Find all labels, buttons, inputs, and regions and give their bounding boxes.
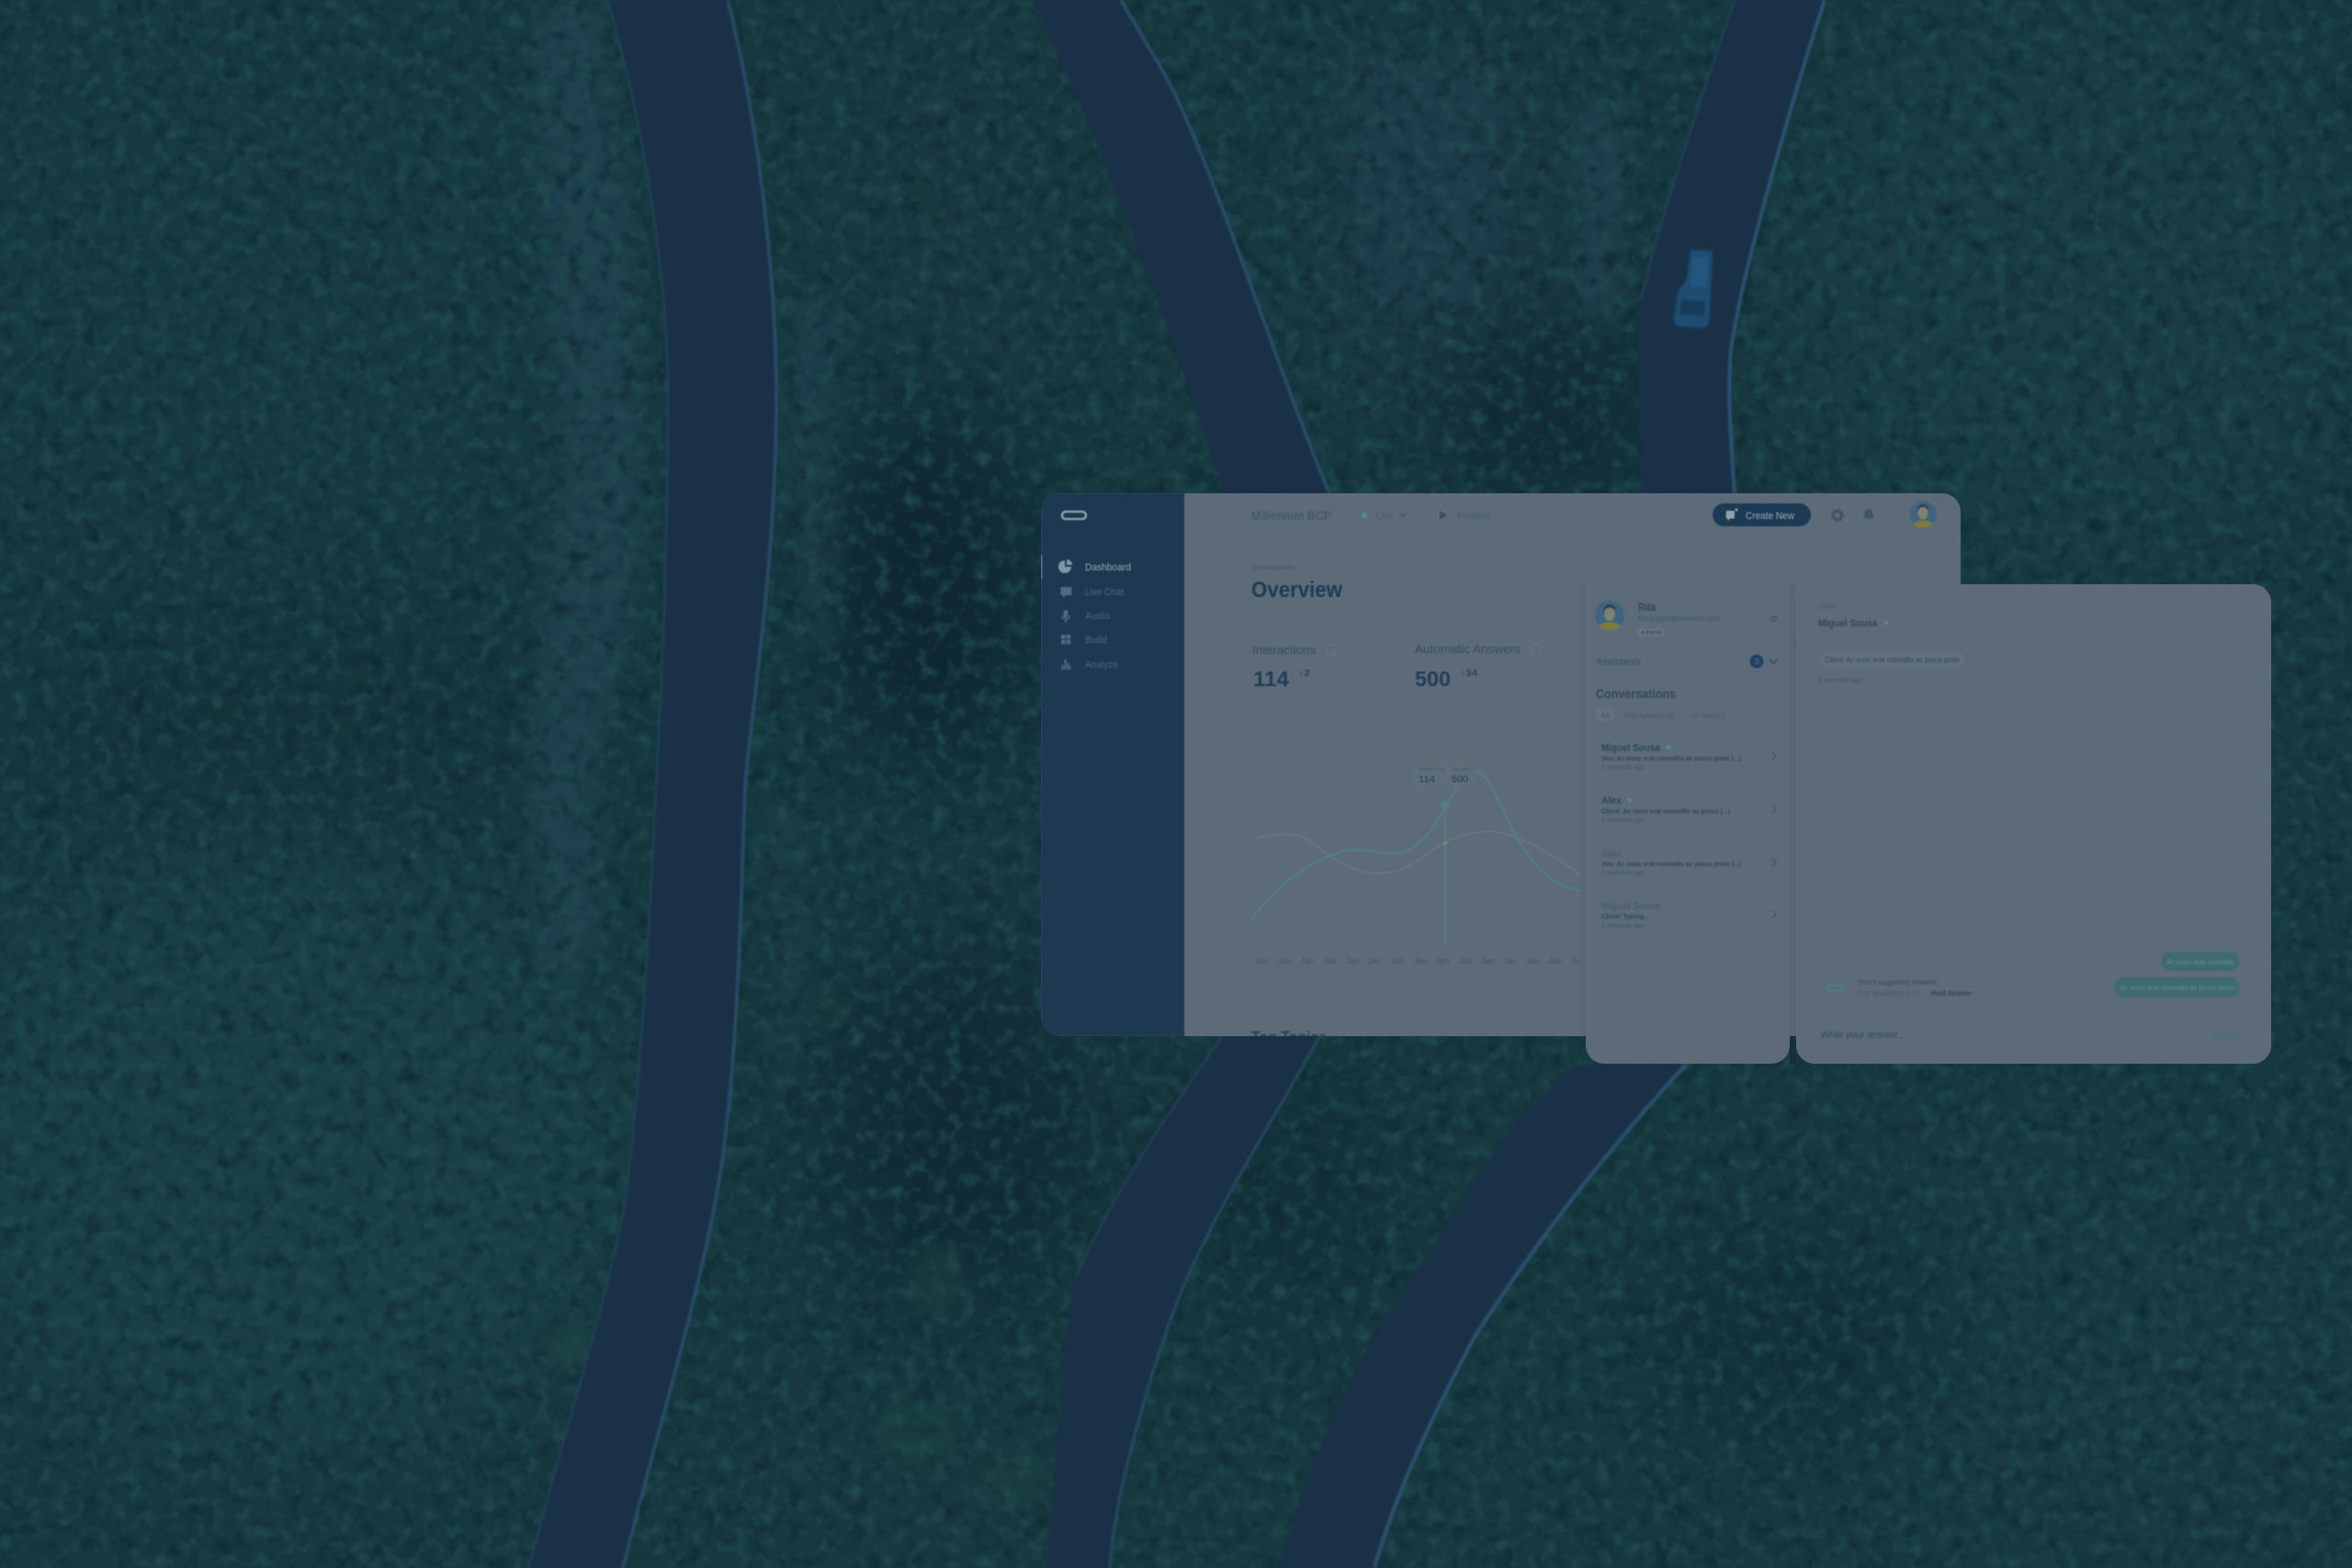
chart x axis labels: Jan <box>1301 956 1314 965</box>
user details: Rita <box>1638 601 1656 614</box>
conversation: Miguel Sousa <box>1601 742 1776 772</box>
metric: Automatic Answers: ↑34 <box>1460 669 1478 679</box>
conversation: Miguel Sousa typing: Client: Typing... <box>1601 912 1649 920</box>
chart x axis labels: Jan <box>1255 956 1269 965</box>
assistants row: Assistants <box>1596 657 1641 668</box>
icon: Visor logo <box>1827 985 1843 990</box>
conversation: Alex: Alex <box>1601 795 1623 807</box>
user details: rita.seguro@millenium.com <box>1638 614 1720 623</box>
conversation: Alex: Client: Ac nunc erat convallis ac purus (...) <box>1601 807 1730 815</box>
assistants row: 3 <box>1755 658 1759 666</box>
client header: Client <box>1818 603 1838 611</box>
suggested answer chip <box>2161 952 2240 971</box>
metric: Interactions: Interactions <box>1252 643 1317 657</box>
panel: main dashboard window <box>1040 493 1961 1048</box>
chart x axis labels: Jan <box>1346 956 1359 965</box>
road: middle road <box>1031 0 1329 1568</box>
chart x axis labels: Jan <box>1526 956 1540 965</box>
heading: Overview: Overview <box>1251 578 1342 603</box>
conversation: João: 2 seconds ago <box>1601 869 1645 876</box>
suggestion status: Hold Answer <box>1931 989 1972 998</box>
filter tabs: With Assistant (0) <box>1624 711 1675 720</box>
icon: small gear <box>1771 616 1777 621</box>
button: Preview <box>1440 511 1490 522</box>
client header: Miguel Sousa <box>1818 618 1878 629</box>
metric: Automatic Answers: Automatic Answers <box>1415 642 1521 656</box>
chart x axis labels: Jan <box>1414 956 1427 965</box>
heading: Top Topics (clipped): Top Topics <box>1251 1029 1327 1048</box>
active indicator <box>1041 555 1043 579</box>
conversation: Miguel Sousa typing: 2 seconds ago <box>1601 921 1645 930</box>
nav item: Build <box>1061 635 1107 646</box>
panel: sidebar <box>1040 493 1184 1036</box>
chart x axis labels: Jan <box>1481 956 1495 965</box>
metric: Automatic Answers <box>1415 642 1542 691</box>
conversation: Miguel Sousa typing <box>1601 901 1776 930</box>
metric: Interactions: ↑2 <box>1298 669 1311 679</box>
nav item: Dashboard: Dashboard <box>1085 562 1131 573</box>
nav item: Live Chat <box>1060 587 1124 598</box>
answer input <box>1821 1030 2240 1041</box>
conversation: João: João <box>1601 849 1621 860</box>
nav item: Dashboard <box>1058 559 1131 573</box>
chart tooltip: 500 <box>1452 775 1468 784</box>
answer input: Write your answer... <box>1821 1030 1905 1041</box>
chart x axis labels: Jan <box>1504 956 1517 965</box>
nav item: Build: Build <box>1085 635 1107 646</box>
filter tabs: On Hold (1) <box>1690 711 1725 720</box>
conversation: Miguel Sousa typing: Miguel Sousa <box>1601 901 1661 912</box>
nav item: Analyze: Analyze <box>1085 660 1118 671</box>
suggestion status <box>1857 978 1972 998</box>
avatar: top bar <box>1909 502 1937 528</box>
metric: Interactions: 114 <box>1253 667 1289 691</box>
icon: settings gear <box>1832 509 1843 522</box>
suggested answer chip: Ac nunc erat convallis <box>2166 958 2234 966</box>
chart x axis labels <box>1255 956 1585 965</box>
top bar: project name: Millenium BCP <box>1251 508 1331 523</box>
heading: breadcrumb: DASHBOARD <box>1251 566 1296 571</box>
chart x axis labels: Jan <box>1391 956 1404 965</box>
chart x axis labels: Jan <box>1572 956 1585 965</box>
line chart: interactions and answers over time <box>1252 763 1585 965</box>
metric: Automatic Answers: 500 <box>1415 667 1451 691</box>
conversation: Miguel Sousa: 2 seconds ago <box>1601 762 1645 772</box>
car on the road <box>1674 250 1713 328</box>
suggestion status: Auto answering in 5s... <box>1857 989 1925 998</box>
message bubble <box>1818 652 1964 684</box>
assistants row <box>1596 654 1778 669</box>
status: Live selector <box>1362 511 1406 522</box>
conversation: Miguel Sousa: Miguel Sousa <box>1601 742 1661 753</box>
conversation: Miguel Sousa: You: Ac nunc erat convallis ac purus proin (...) <box>1601 754 1741 762</box>
suggested answer chip: Ac nunc erat convallis ac purus proin <box>2120 984 2234 992</box>
chart x axis labels: Jan <box>1323 956 1337 965</box>
conversation: Alex <box>1601 795 1776 824</box>
filter tabs: All <box>1600 711 1610 720</box>
chart x axis labels: Jan <box>1436 956 1449 965</box>
icon: logo pill <box>1062 512 1086 519</box>
icon: notification bell <box>1863 509 1874 520</box>
chart tooltip: Answers <box>1452 767 1473 773</box>
client header: online <box>1894 619 1914 627</box>
button: Create New <box>1713 503 1811 526</box>
nav item: Audio: Audio <box>1085 611 1110 622</box>
chart tooltip: 114 <box>1419 775 1435 784</box>
button: Create New: Create New <box>1746 511 1794 522</box>
metric: Interactions <box>1252 643 1336 691</box>
user details <box>1638 601 1720 637</box>
panel: conversations sidebar <box>1580 584 1796 1064</box>
panel: chat thread <box>1794 584 2271 1064</box>
button: Preview: Preview <box>1457 511 1490 522</box>
status: Live selector: Live <box>1376 511 1393 522</box>
message bubble: 2 seconds ago <box>1818 676 1863 684</box>
chart tooltip <box>1413 763 1476 788</box>
suggestion status: Visor's suggested answers: <box>1857 978 1939 987</box>
chart x axis labels: Jan <box>1368 956 1382 965</box>
nav item: Audio <box>1062 610 1110 623</box>
chart x axis labels: Jan <box>1278 956 1291 965</box>
user details: ADMIN <box>1641 630 1662 636</box>
conversation: João: You: Ac nunc erat convallis ac purus proin (...) <box>1601 860 1741 868</box>
chart x axis labels: Jan <box>1459 956 1472 965</box>
chart tooltip: Interactions <box>1419 767 1446 773</box>
avatar: Rita <box>1595 601 1624 630</box>
nav item: Live Chat: Live Chat <box>1085 587 1124 598</box>
answer input: Enviar <box>2212 1030 2240 1041</box>
client header <box>1818 603 1914 629</box>
chart x axis labels: Jan <box>1549 956 1562 965</box>
collapse handle <box>1794 638 1796 647</box>
suggested answer chip <box>2114 977 2240 998</box>
conversation: João <box>1601 849 1776 876</box>
road: left road <box>528 0 776 1568</box>
conversation: Alex: 2 seconds ago <box>1601 816 1645 824</box>
road: right road <box>1281 0 1825 1568</box>
message bubble: Client: Ac nunc erat convallis ac purus proin <box>1825 656 1960 664</box>
filter tabs <box>1596 709 1725 721</box>
nav item: Analyze <box>1062 660 1118 671</box>
heading: Conversations: Conversations <box>1596 686 1676 701</box>
